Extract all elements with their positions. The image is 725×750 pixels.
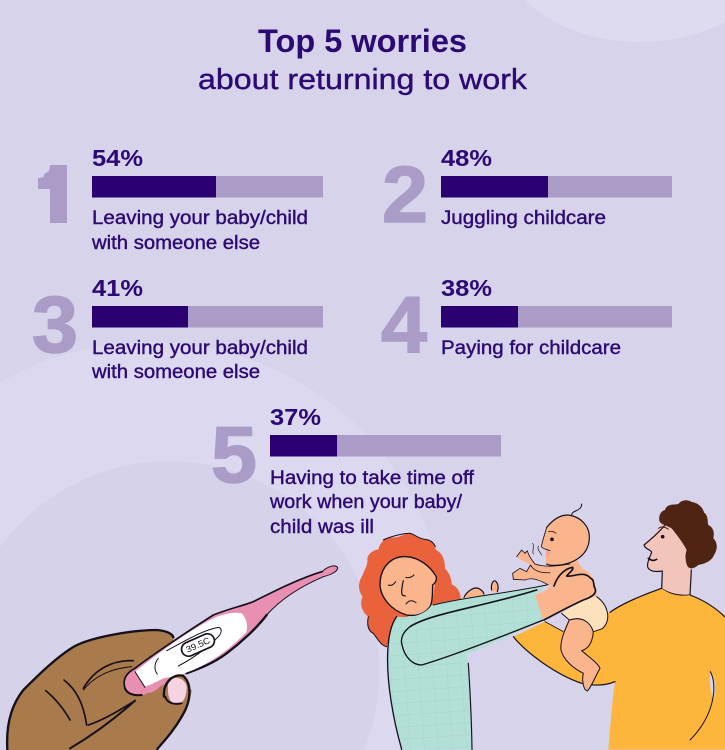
worry 4: 38% <box>441 275 492 301</box>
baby <box>513 504 608 691</box>
worry 2: 2 <box>382 150 428 239</box>
illustration: hand holding thermometer: 39.5C <box>184 635 212 655</box>
worry 3: 41% <box>92 275 143 301</box>
title <box>198 23 528 96</box>
worry 2 <box>382 145 672 239</box>
worry 3: 3 <box>32 280 78 369</box>
title: Top 5 worries <box>258 23 467 59</box>
worry 5: 5 <box>211 410 257 499</box>
worry 1: with someone else <box>91 233 260 254</box>
worry 3 <box>32 275 323 383</box>
man <box>513 500 725 750</box>
worry 4 <box>381 275 672 369</box>
worry 1: 54% <box>92 145 143 171</box>
worry 4: 4 <box>381 280 428 369</box>
worry 4: Paying for childcare <box>441 338 621 359</box>
woman hair <box>359 533 461 647</box>
worry 5: 37% <box>270 404 321 430</box>
worry 1: 1 <box>37 150 83 239</box>
worry 1 <box>37 145 323 254</box>
worry 1: Leaving your baby/child <box>92 208 308 229</box>
worry 3: Leaving your baby/child <box>92 338 308 359</box>
woman face <box>380 557 437 615</box>
worry 2: Juggling childcare <box>441 208 606 229</box>
title: about returning to work <box>198 64 528 96</box>
woman shirt and arm <box>388 567 597 750</box>
worry 5: Having to take time off <box>270 468 475 489</box>
worry 5 <box>211 404 501 538</box>
illustration: father, mother and baby <box>359 500 725 750</box>
worry 3: with someone else <box>91 362 260 383</box>
woman far hand <box>464 581 498 598</box>
worry 5: child was ill <box>270 517 374 538</box>
illustration: hand holding thermometer <box>7 566 338 750</box>
worry 2: 48% <box>441 145 492 171</box>
worry 5: work when your baby/ <box>269 492 463 513</box>
